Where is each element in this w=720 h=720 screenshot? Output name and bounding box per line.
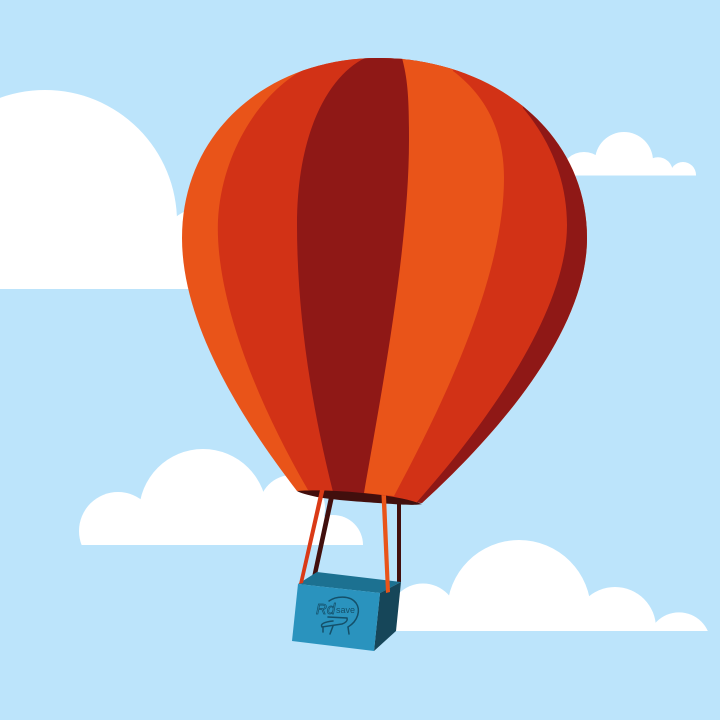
cloud: lower right	[396, 540, 708, 631]
basket	[292, 572, 401, 651]
cloud: small top right	[568, 132, 696, 176]
basket interior	[298, 572, 401, 593]
basket side	[374, 582, 401, 651]
balloon rear ropes	[312, 497, 401, 582]
basket front	[292, 584, 380, 651]
envelope dark center panel	[297, 50, 409, 493]
cloud: large left	[0, 90, 188, 289]
envelope red panel	[218, 50, 567, 502]
rope right	[382, 495, 390, 593]
balloon envelope	[170, 50, 600, 510]
envelope orange center panel	[364, 50, 504, 496]
basket logo	[321, 597, 358, 634]
rope left	[299, 490, 324, 584]
envelope base orange	[170, 50, 600, 510]
balloon neck	[297, 490, 422, 505]
basket logo text: Rd: Rd	[316, 601, 336, 618]
front ropes	[299, 490, 390, 593]
envelope right dark panel	[417, 106, 587, 503]
basket logo text: save: save	[336, 605, 355, 615]
cloud: lower left	[79, 449, 363, 545]
